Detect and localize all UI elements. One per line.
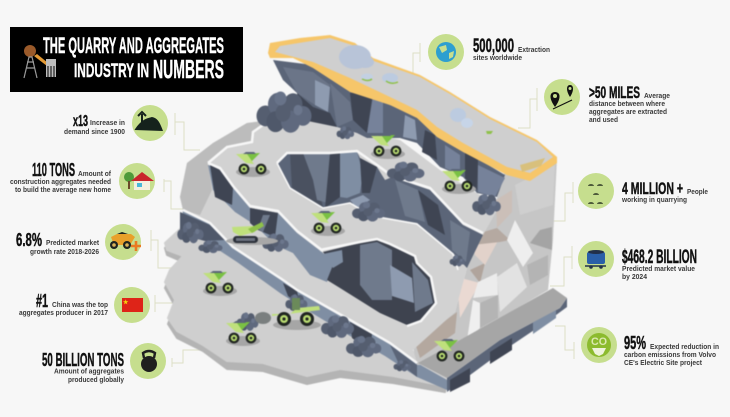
stat: 4 million: People	[687, 187, 708, 196]
stat: 6.8%	[16, 224, 141, 260]
stat: x13: x13	[73, 113, 88, 130]
stat: over 50 miles	[544, 79, 670, 124]
plateau water pools	[339, 45, 493, 134]
stat: 6.8%: Predicted market	[46, 238, 100, 247]
stat: over 50 miles: >50 MILES	[589, 83, 640, 102]
title text: THE QUARRY AND AGGREGATES	[43, 33, 224, 58]
ground slab	[165, 220, 447, 392]
pit 2	[320, 239, 436, 326]
stat: 95 percent: CE's Electric Site project	[624, 358, 703, 367]
icon: mound with arrow	[132, 105, 168, 141]
tier B surface	[180, 118, 500, 363]
stat: market value: by 2024	[622, 272, 647, 281]
pit 1	[277, 151, 483, 270]
stat: x13	[64, 105, 168, 141]
title banner	[10, 27, 243, 92]
stat: 110 tons	[10, 160, 155, 199]
stat: over 50 miles: aggregates are extracted	[589, 107, 667, 116]
quarry illustration	[165, 35, 567, 392]
connector lines	[151, 43, 574, 367]
stat: 50 billion tons: produced globally	[68, 375, 124, 384]
plateau with yellow edge	[268, 35, 557, 181]
stat: x13: Increase in	[90, 118, 125, 127]
stat: 110 tons: Amount of	[78, 169, 112, 178]
icon: truck with plus	[105, 224, 141, 260]
icon: workers	[578, 173, 614, 209]
stat: #1 China: aggregates producer in 2017	[19, 308, 108, 317]
stat: over 50 miles: and used	[589, 115, 618, 124]
stat: 95 percent	[581, 327, 719, 367]
icon: CO2 cloud: CO	[591, 336, 607, 348]
stat: 6.8%: growth rate 2018-2026	[30, 247, 99, 256]
stat: 500,000: 500,000	[473, 36, 514, 57]
rock piles	[177, 92, 501, 371]
title text	[43, 33, 224, 84]
haul trucks	[203, 134, 476, 364]
icon: kettlebell	[130, 343, 166, 379]
stat: 110 tons: 110 TONS	[32, 160, 75, 180]
stat: 95 percent: carbon emissions from Volvo	[624, 350, 717, 359]
stat: market value: Predicted market value	[622, 264, 695, 273]
icon: China flag: ★	[123, 299, 129, 306]
icon: quarry tower logo	[24, 45, 56, 78]
stat: 500,000	[428, 34, 550, 70]
stat: 4 million: working in quarrying	[621, 195, 687, 204]
stat: 95 percent: 95%	[624, 333, 646, 353]
title text: INDUSTRY IN	[74, 60, 149, 82]
stat: 50 billion tons: 50 BILLION TONS	[42, 350, 124, 370]
stat: 6.8%: 6.8%	[16, 230, 42, 250]
stat: 110 tons: construction aggregates needed	[10, 177, 111, 186]
stat: over 50 miles: distance between where	[589, 99, 665, 108]
right rock face	[413, 158, 557, 365]
icon: mine cart	[578, 241, 614, 277]
stat: over 50 miles: Average	[644, 91, 670, 100]
cliff band above slab	[180, 210, 447, 390]
stat: market value	[578, 241, 697, 281]
title text: NUMBERS	[153, 54, 224, 84]
stat: x13: demand since 1900	[64, 127, 125, 136]
bottom platform	[418, 288, 567, 392]
icon: map pins	[544, 79, 580, 115]
stat: 110 tons: to build the average new home	[15, 185, 111, 194]
left cliff	[208, 163, 333, 282]
upper cliff	[273, 60, 505, 197]
stat: #1 China: China was the top	[52, 300, 109, 309]
large loader	[272, 298, 321, 330]
icon: house	[119, 163, 155, 199]
excavator	[226, 222, 278, 245]
stat: #1 China: #1	[36, 291, 48, 311]
icon: globe	[428, 34, 464, 70]
stat: 500,000: sites worldwide	[473, 53, 522, 62]
stat: 50 billion tons	[42, 343, 166, 384]
stat: 95 percent: Expected reduction in	[650, 342, 719, 351]
stat: 500,000: Extraction	[518, 45, 550, 54]
stat: #1 China	[19, 287, 150, 323]
stat: 4 million	[578, 173, 708, 209]
stat: 50 billion tons: Amount of aggregates	[54, 366, 124, 376]
stat: 4 million: 4 MILLION +	[622, 179, 683, 198]
